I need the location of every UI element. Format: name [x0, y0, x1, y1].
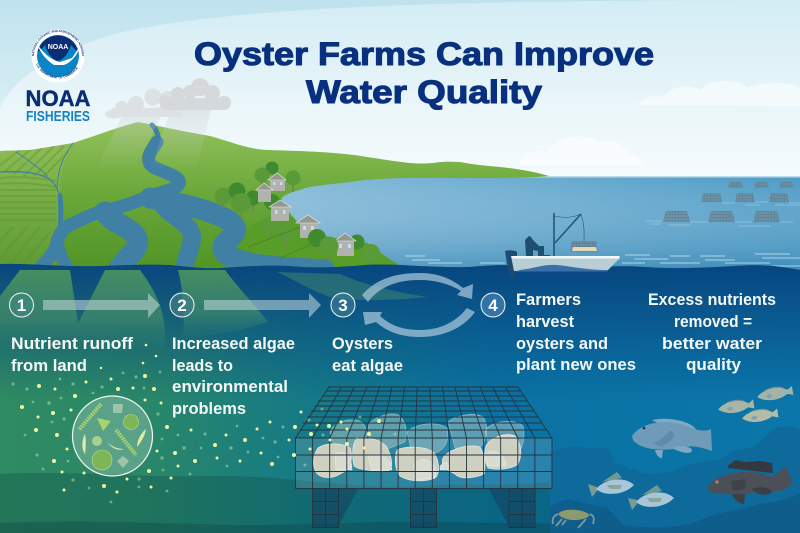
NOAA Fisheries logo: [26, 30, 90, 125]
dark fish: [707, 460, 793, 504]
title: [194, 36, 654, 110]
sea surface: [0, 176, 800, 272]
step 3: [331, 293, 403, 375]
underwater algae dots: [11, 344, 279, 503]
distant oyster cages: [663, 182, 794, 222]
front oysters: [314, 435, 521, 481]
step 2: problems: [172, 400, 246, 418]
step 4: Farmers: [516, 291, 581, 309]
small farm streams: [0, 143, 73, 252]
rain beams: [96, 106, 212, 170]
sky swoosh: [0, 0, 800, 180]
step 4: 4: [488, 296, 498, 315]
outcome text: better water: [662, 335, 763, 353]
step 1: Nutrient runoff: [11, 335, 134, 353]
NOAA Fisheries logo: FISHERIES: [26, 108, 90, 125]
magnified algae circle: [72, 396, 152, 476]
step 4: oysters and: [516, 335, 608, 353]
underwater background: [0, 264, 800, 533]
surface ripples: [405, 254, 800, 266]
distant ripples: [645, 202, 800, 226]
outcome text: Excess nutrients: [648, 291, 776, 309]
fishing boat with oyster cage: [505, 213, 620, 279]
seabed layers: [0, 473, 560, 533]
oyster cage: [296, 387, 552, 528]
step 2: environmental: [172, 378, 288, 396]
hill and shoreline: [0, 122, 549, 280]
step 1: [10, 293, 134, 375]
title: Oyster Farms Can Improve: [194, 36, 654, 72]
circular arrows: oysters and harvest: [362, 273, 475, 337]
step 4: harvest: [516, 313, 574, 331]
step 2: 2: [177, 296, 187, 315]
step 1: 1: [17, 296, 26, 315]
step 4: [481, 291, 636, 374]
step 3: eat algae: [332, 357, 403, 375]
houses and trees: [214, 162, 380, 267]
step 3: 3: [338, 296, 348, 315]
back oysters: [330, 414, 524, 456]
algae dots drifting into the cage: [282, 408, 396, 466]
title: Water Quality: [306, 74, 542, 110]
step 2: leads to: [172, 357, 233, 375]
cage frame: [296, 387, 552, 488]
lower shore terrace: [238, 217, 402, 272]
reef silhouettes: [550, 427, 800, 533]
step 3: Oysters: [332, 335, 393, 353]
big blue fish: [632, 419, 712, 458]
small pale fish group: [717, 384, 794, 424]
cage legs: [312, 488, 535, 528]
NOAA Fisheries logo: U.S. DEPARTMENT OF COMMERCE: [36, 63, 78, 78]
silver fish pair: [588, 472, 674, 510]
outcome text: removed =: [674, 313, 752, 331]
arrow: step 1 to 2: [43, 293, 160, 318]
river system: [36, 125, 325, 272]
rain cloud: [105, 78, 231, 118]
step 4: plant new ones: [516, 356, 636, 374]
arrow: step 2 to 3: [204, 293, 321, 318]
outcome text: quality: [686, 356, 742, 374]
river plumes underwater: [0, 270, 427, 350]
sky: [0, 0, 800, 180]
NOAA Fisheries logo: NOAA: [26, 86, 90, 111]
step 2: [170, 293, 295, 418]
clouds on the right: [520, 81, 800, 165]
step 2: Increased algae: [172, 335, 295, 353]
crab: [553, 510, 594, 528]
NOAA Fisheries logo: NOAA: [48, 44, 68, 51]
terraced farm field: [0, 143, 72, 266]
step 1: from land: [11, 357, 87, 375]
outcome text: [648, 291, 776, 374]
